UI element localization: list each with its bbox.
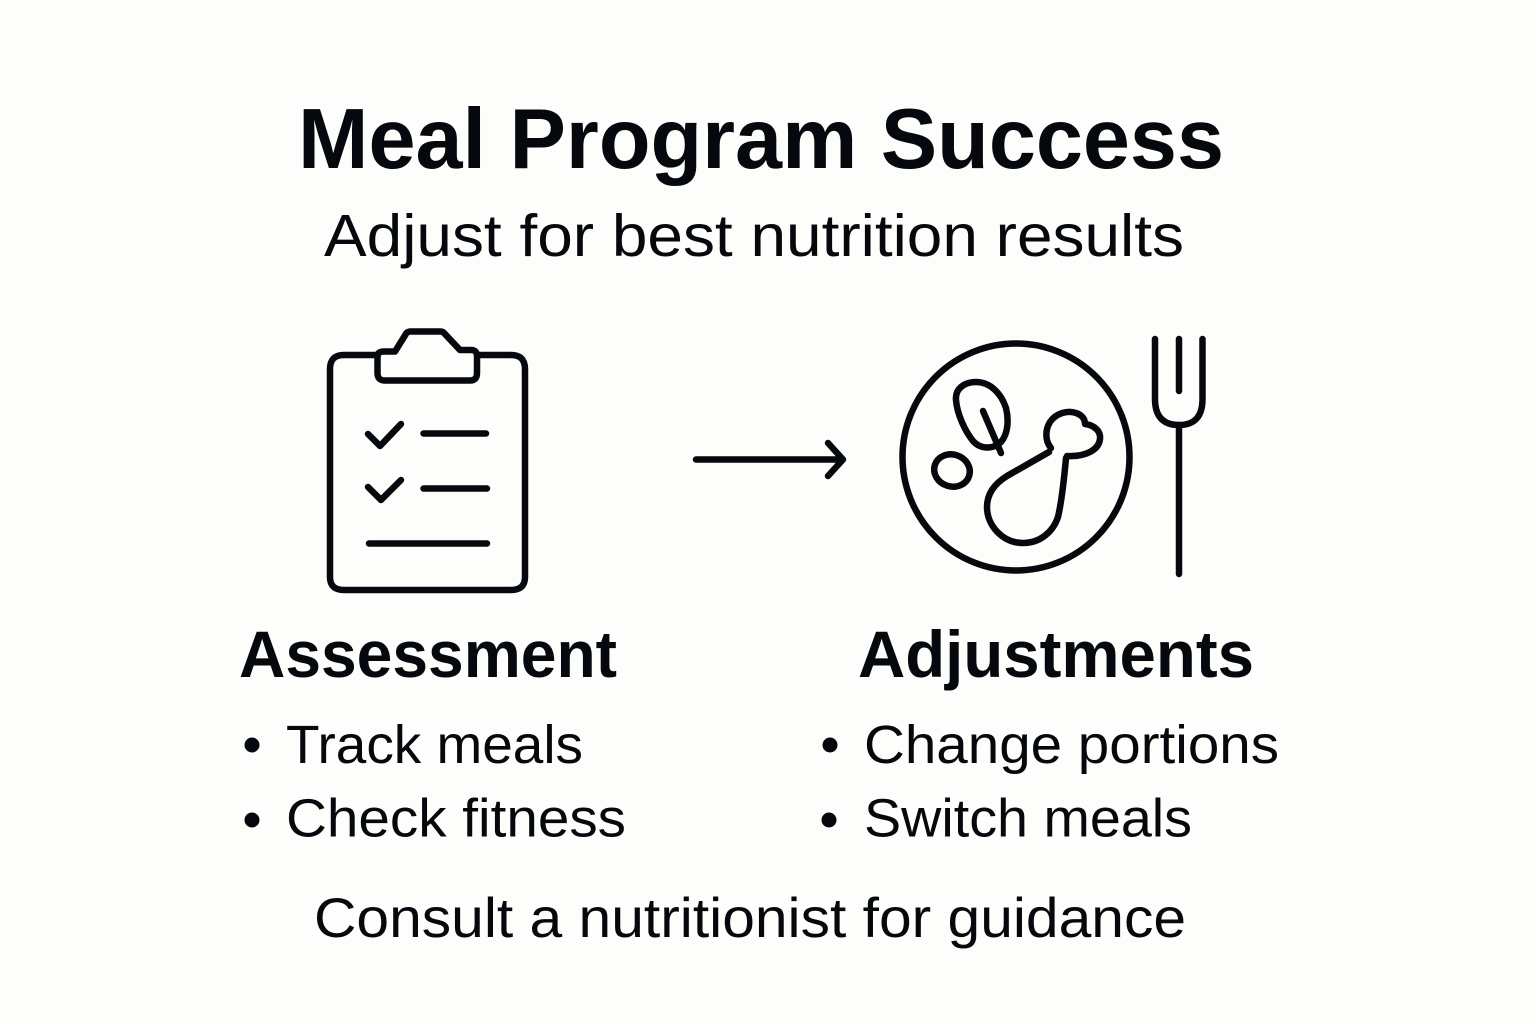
- leaf vein: [983, 411, 1001, 453]
- leaf: [956, 382, 1008, 448]
- list: assessment: [244, 715, 626, 848]
- list: assessment: Check fitness: [286, 788, 626, 848]
- title: Meal Program Success: [298, 92, 1224, 187]
- bean: [930, 450, 974, 491]
- heading: adjustments: Adjustments: [858, 617, 1254, 691]
- icon: plate with food and fork: [902, 339, 1202, 574]
- heading: assessment: Assessment: [239, 617, 617, 691]
- subtitle: Adjust for best nutrition results: [324, 203, 1184, 269]
- chicken bone end: [1046, 412, 1100, 456]
- footer note: Consult a nutritionist for guidance: [314, 886, 1186, 949]
- drumstick: [987, 452, 1066, 543]
- plate: [902, 344, 1130, 570]
- list: assessment: Track meals: [286, 715, 583, 775]
- arrow: [696, 443, 843, 476]
- icon: clipboard checklist: [330, 332, 525, 590]
- list: adjustments: [822, 715, 1279, 848]
- fork: [1155, 339, 1202, 425]
- list: adjustments: Switch meals: [864, 788, 1192, 848]
- list: adjustments: Change portions: [864, 715, 1279, 775]
